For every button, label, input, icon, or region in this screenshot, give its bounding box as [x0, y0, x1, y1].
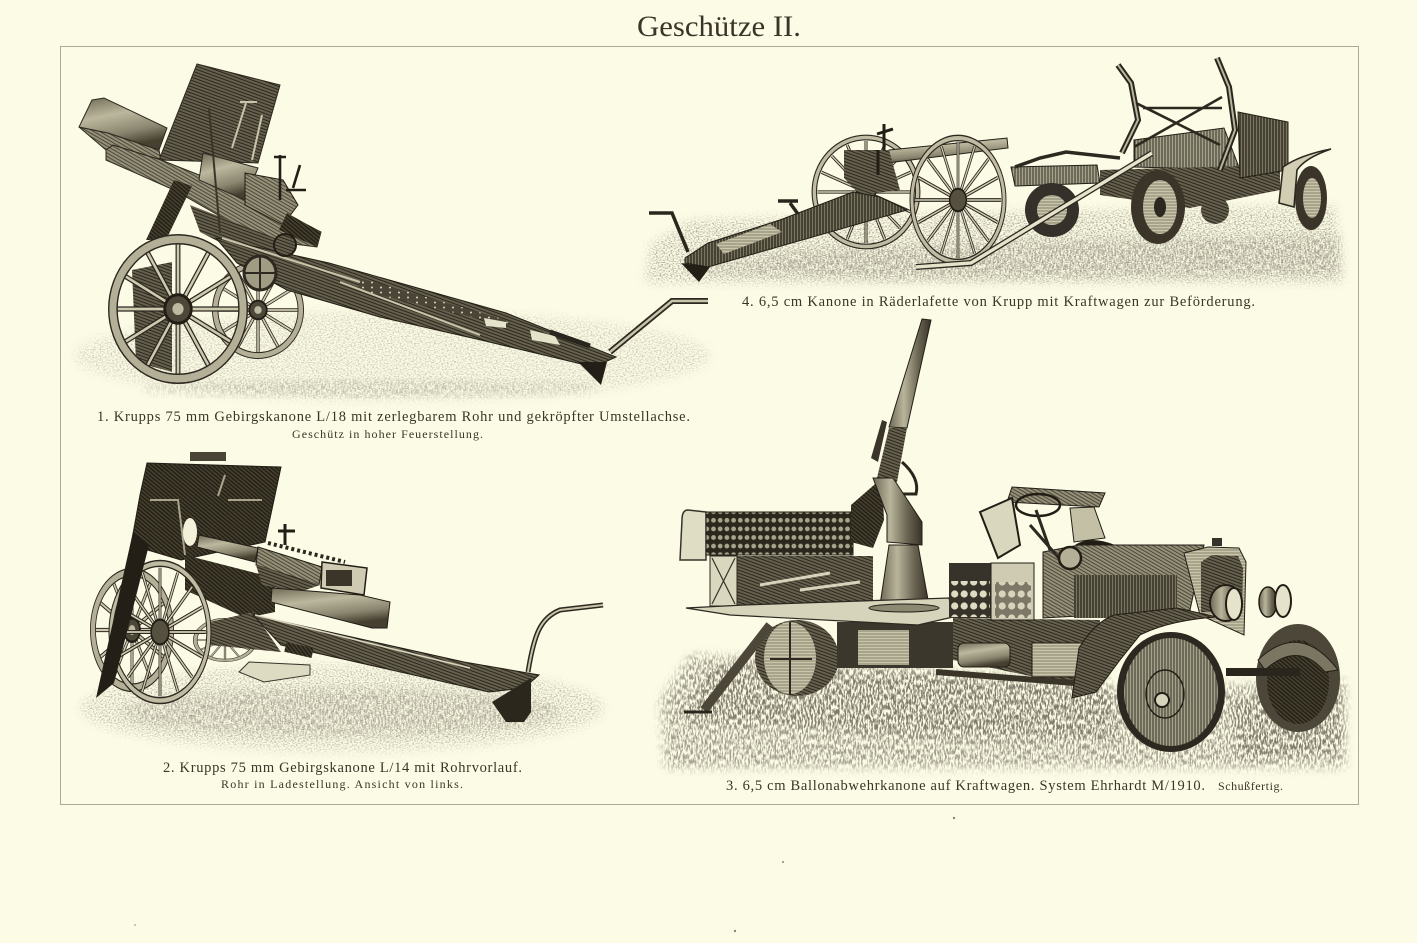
shield: [131, 463, 281, 560]
folding plate: [96, 532, 149, 698]
headlamps: [1210, 585, 1291, 621]
ground: [74, 311, 710, 401]
cabinet: [710, 556, 873, 606]
axle link: [210, 612, 281, 652]
radiator: [1238, 112, 1288, 178]
trail: [216, 238, 616, 367]
pedestal: [880, 545, 929, 605]
ground: [645, 205, 1343, 283]
handle: [649, 213, 688, 252]
trail: [253, 615, 539, 692]
truck front wheel: [1131, 170, 1185, 244]
caption 2: Rohr in Ladestellung. Ansicht von links.: [221, 777, 463, 791]
pedestal base: [869, 604, 939, 612]
barrel tube: [197, 535, 258, 562]
handle: [610, 301, 708, 352]
truck far front wheel: [1295, 166, 1327, 230]
margin specks: [134, 817, 955, 932]
chassis: [953, 618, 1100, 685]
front wheel: [111, 563, 209, 701]
deck: [686, 598, 953, 625]
title: Geschütze II.: [637, 10, 801, 43]
chassis: [1100, 165, 1280, 208]
front wheel: [113, 239, 243, 379]
gun rear wheel: [814, 137, 918, 247]
sled front: [79, 127, 161, 160]
gun barrel: [887, 138, 1008, 163]
engraving 2: Krupp 75 mm L/14 with forward recoil: [80, 452, 604, 752]
lower tube: [271, 588, 390, 628]
rear wheel: [215, 264, 301, 356]
teeth rail: [268, 543, 345, 562]
gun front wheel: [912, 138, 1004, 262]
caption 4: 4. 6,5 cm Kanone in Räderlafette von Krupp mit Kraftwagen zur Beförderung.: [742, 294, 1255, 310]
handwheel: [244, 256, 276, 290]
far front wheel: [1226, 624, 1340, 732]
trail: [685, 192, 907, 267]
engraving 4: 6.5 cm gun with motor vehicle: [645, 58, 1343, 283]
spade: [578, 362, 607, 385]
struts: [146, 180, 192, 240]
ramp: [916, 153, 1152, 267]
shadow behind wheel: [132, 262, 172, 372]
cradle: [106, 145, 321, 247]
grass: [660, 655, 1345, 768]
vehicle rear wheels: [1025, 183, 1229, 237]
shield: [159, 64, 280, 163]
gun barrel: [889, 319, 931, 428]
seat: [778, 201, 798, 214]
sight: [877, 124, 893, 175]
handle: [528, 605, 603, 672]
breech block: [245, 173, 298, 225]
recoil cylinder: [871, 420, 887, 462]
breech: [321, 562, 367, 595]
sight: [274, 155, 306, 200]
lower bar: [936, 672, 1074, 683]
barrel front: [79, 98, 167, 150]
sight: [278, 524, 295, 545]
bonnet: [1043, 545, 1204, 618]
rear wheel: [755, 620, 839, 696]
breech: [844, 150, 900, 195]
ammunition rack: [680, 510, 853, 560]
column: [873, 478, 922, 545]
sleeve: [256, 547, 322, 585]
shield window: [183, 518, 197, 546]
rear wheel: [93, 572, 171, 688]
caption 2: [163, 760, 522, 791]
caption 1: Geschütz in hoher Feuerstellung.: [292, 427, 483, 441]
foot plate: [239, 662, 310, 682]
radiator: [1184, 538, 1246, 635]
lower cradle fill: [190, 205, 300, 262]
quadrant: [902, 462, 917, 494]
mudguard: [1072, 608, 1217, 698]
windscreen and roof: [980, 487, 1115, 565]
caption 1: [97, 409, 690, 441]
caption 3: Schußfertig.: [1218, 779, 1283, 793]
louvres: [1074, 575, 1177, 618]
vehicle platform: [1011, 165, 1100, 186]
gear: [274, 234, 296, 256]
caption 1: 1. Krupps 75 mm Gebirgskanone L/18 mit zerlegbarem Rohr und gekröpfter Umstellachse.: [97, 409, 690, 425]
cowl lamp: [1059, 547, 1081, 569]
engraving 1: Krupp 75 mm mountain gun, high firing position: [74, 64, 710, 401]
body side: [1134, 128, 1240, 170]
cylinder: [958, 643, 1010, 667]
plate frame: [60, 46, 1358, 804]
mudguard: [1279, 149, 1331, 207]
rod: [209, 108, 220, 233]
loading frame: [1118, 58, 1235, 170]
shell locker: [949, 563, 1034, 620]
bracket: [185, 555, 275, 618]
left mount equipment: [851, 478, 884, 548]
spade: [492, 678, 531, 722]
body under sleeve: [256, 565, 320, 592]
engraving 3: 6.5 cm anti-balloon gun on motor vehicle: [660, 319, 1345, 768]
caption 3: 3. 6,5 cm Ballonabwehrkanone auf Kraftwagen. System Ehrhardt M/1910.: [726, 778, 1205, 794]
caption 2: 2. Krupps 75 mm Gebirgskanone L/14 mit Rohrvorlauf.: [163, 760, 522, 776]
spade: [681, 263, 710, 282]
tool box: [1032, 643, 1086, 677]
top tab: [190, 452, 226, 461]
under box: [837, 622, 953, 668]
strut: [704, 625, 770, 710]
ground: [80, 664, 604, 752]
front wheel: [1117, 632, 1225, 752]
barrel rear: [199, 153, 258, 200]
